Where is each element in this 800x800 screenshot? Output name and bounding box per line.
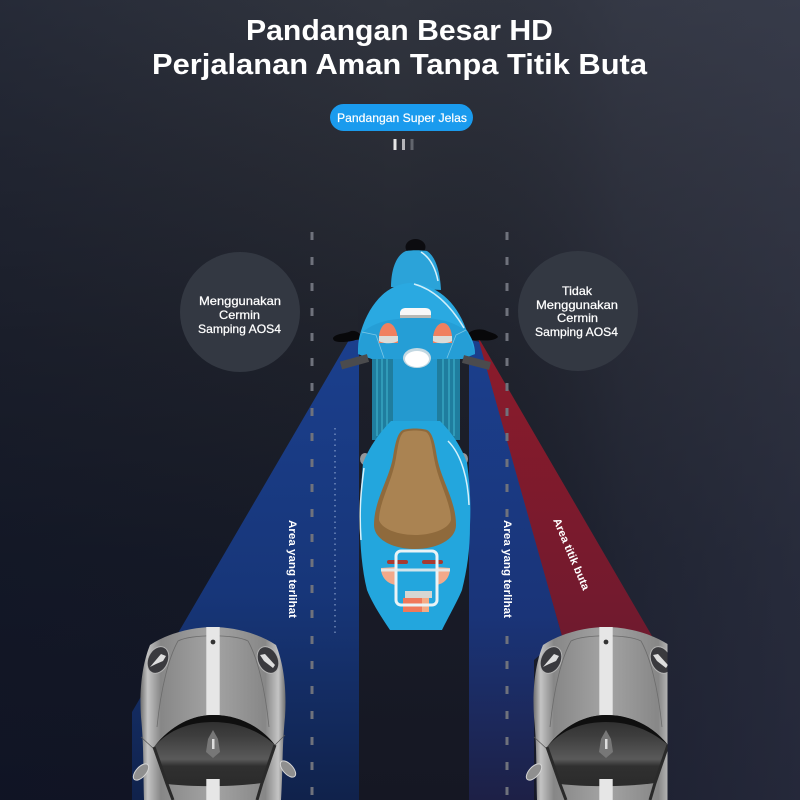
faint dotted line <box>334 428 336 636</box>
right handle grip <box>463 359 490 366</box>
tail lights <box>381 567 396 585</box>
callout: with AOS4 mirror <box>180 252 300 372</box>
callout: without AOS4 mirror: Tidak <box>562 284 593 298</box>
label: right visible area: Area yang terlihat <box>501 520 513 618</box>
pagination bars <box>394 139 414 150</box>
title: Perjalanan Aman Tanpa Titik Buta <box>152 49 648 81</box>
rear grey pad <box>405 591 432 598</box>
title: Pandangan Besar HD <box>246 15 553 47</box>
callout: without AOS4 mirror: Samping AOS4 <box>535 325 618 339</box>
scooter <box>333 239 498 630</box>
rear body <box>360 421 470 630</box>
right visible area beam <box>469 340 562 800</box>
title <box>152 15 648 81</box>
front fender <box>391 250 441 290</box>
center road lane <box>358 290 469 800</box>
left car <box>131 627 298 800</box>
label: left visible area: Area yang terlihat <box>286 520 298 618</box>
left handle grip <box>341 358 368 366</box>
center lamp <box>403 348 431 368</box>
front wheel <box>406 239 426 255</box>
left mirror <box>333 331 361 342</box>
badge: Pandangan Super Jelas <box>330 104 473 131</box>
callout: with AOS4 mirror: Cermin <box>219 308 260 322</box>
body grooves <box>372 355 460 440</box>
headlight plate <box>400 308 431 318</box>
left indicator <box>379 323 398 343</box>
foot pegs <box>360 453 370 465</box>
lane dashes <box>310 232 508 795</box>
seat <box>374 428 456 549</box>
badge: Pandangan Super Jelas: Pandangan Super Jelas <box>337 111 467 125</box>
right car <box>526 627 668 800</box>
callout: without AOS4 mirror <box>518 251 638 371</box>
main fairing <box>358 283 475 359</box>
right mirror <box>467 329 498 341</box>
right blind spot beam <box>478 338 652 636</box>
callout: with AOS4 mirror: Samping AOS4 <box>198 322 281 336</box>
rear orange light <box>403 598 429 612</box>
label: blind spot: Area titik buta <box>550 516 592 593</box>
callout: without AOS4 mirror: Menggunakan <box>536 298 618 312</box>
callout: without AOS4 mirror: Cermin <box>557 311 598 325</box>
luggage rack <box>396 551 437 605</box>
left visible area beam <box>132 340 359 800</box>
right indicator <box>433 323 452 343</box>
callout: with AOS4 mirror: Menggunakan <box>199 294 281 308</box>
